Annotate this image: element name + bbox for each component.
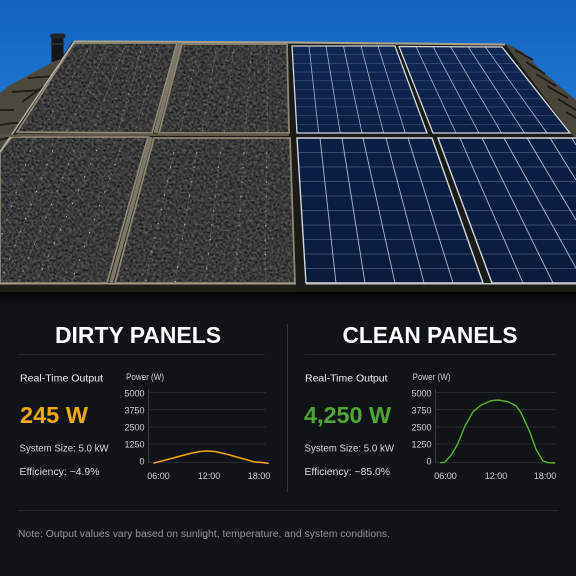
chart: dirty power output: 18:00 <box>248 471 270 481</box>
chart: clean power output: 5000 <box>411 388 432 398</box>
clean panel top-left <box>292 46 427 133</box>
green power curve <box>441 400 555 463</box>
chart: clean power output: 06:00 <box>434 471 457 481</box>
clean panel bottom-right <box>438 138 576 283</box>
icon: chimney vent <box>50 34 66 62</box>
panel: clean panels stats <box>304 322 556 481</box>
clean panel top-right <box>399 46 570 133</box>
chart: dirty power output: 1250 <box>124 440 144 450</box>
roof tiles right <box>500 43 576 140</box>
chart: dirty power output: 3750 <box>124 406 144 416</box>
mounting structure shadow <box>0 42 576 293</box>
chart: clean power output: 18:00 <box>534 471 556 481</box>
vertical divider <box>287 324 288 492</box>
value: 245 W: 245 W <box>20 402 89 428</box>
chart: clean power output: 2500 <box>411 422 432 432</box>
chart: clean power output: 0 <box>426 456 432 466</box>
label: real-time output: Real-Time Output <box>305 372 388 384</box>
left bright side rail <box>0 42 74 152</box>
centre rails <box>111 43 180 283</box>
panel: dashboard background <box>0 292 576 576</box>
chart: dirty power output: 12:00 <box>198 471 220 481</box>
system size: System Size: 5.0 kW <box>304 442 394 454</box>
chart: clean power output: 1250 <box>411 440 432 450</box>
chart: clean power output: 12:00 <box>485 471 507 481</box>
chart: dirty power output <box>124 372 270 481</box>
chart: clean power output: Power (W) <box>412 372 451 382</box>
bottom frame lip <box>0 283 576 284</box>
efficiency: Efficiency: ~85.0% <box>304 466 390 478</box>
photo: solar roof <box>0 0 576 293</box>
roof tiles left <box>0 58 62 150</box>
top rail <box>74 42 505 44</box>
clean panel bottom-left <box>297 138 483 283</box>
chart: dirty power output: 2500 <box>124 422 144 432</box>
chart: dirty power output: 5000 <box>124 388 144 398</box>
chart: dirty power output: 06:00 <box>147 471 170 481</box>
system size: System Size: 5.0 kW <box>20 442 109 454</box>
chart: dirty power output: 0 <box>139 456 144 466</box>
note: Note: Output values vary based on sunlight, temperature, and system conditions. <box>18 529 390 540</box>
heading: clean panels: CLEAN PANELS <box>342 322 518 348</box>
sky <box>0 0 576 136</box>
value: 4,250 W: 4,250 W <box>304 402 392 428</box>
heading: dirty panels: DIRTY PANELS <box>55 322 221 348</box>
label: real-time output: Real-Time Output <box>20 372 103 384</box>
chart: clean power output <box>411 372 556 481</box>
orange power curve <box>154 451 268 463</box>
chart: dirty power output: Power (W) <box>126 372 164 382</box>
panel: dirty panels stats <box>18 322 270 481</box>
efficiency: Efficiency: ~4.9% <box>20 466 100 478</box>
panel: dirty solar panels <box>0 40 296 285</box>
dirty panel bases <box>0 40 296 285</box>
chart: clean power output: 3750 <box>411 406 432 416</box>
panel: clean solar panels <box>292 46 576 283</box>
footer divider <box>18 510 558 511</box>
dirty panel frames <box>0 43 295 283</box>
